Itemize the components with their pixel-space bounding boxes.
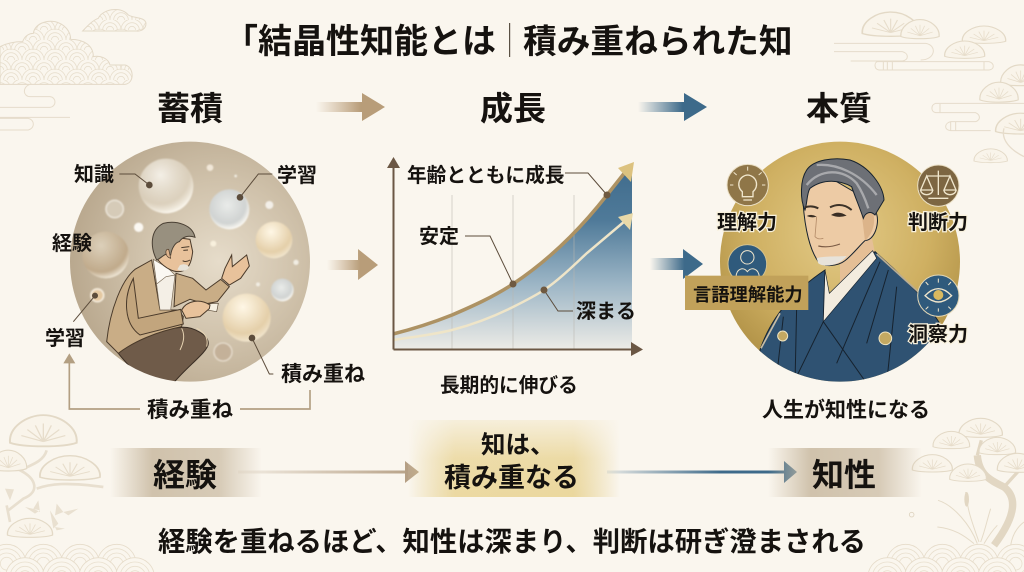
heading: 本質: 本質 [806,90,872,127]
icon: person [728,245,767,283]
band: 知性: 知性 [812,457,876,493]
label: 深まる: 深まる [576,300,636,323]
label: 言語理解能力: 言語理解能力 [693,284,803,305]
panel: 本質 portrait [685,142,960,383]
label: 経験: 経験 [52,232,92,255]
icon: head [801,159,884,266]
data points [604,192,610,198]
label: 判断力: 判断力 [908,211,968,234]
upper curve [393,171,626,334]
decoration: bottom-left pine and waves [0,415,154,572]
band: 知は、積み重なる [408,420,620,497]
icon: seated man [107,222,249,383]
label: 学習 bottom: 学習 [45,327,85,350]
title [224,23,793,61]
band: 経験 [110,448,262,497]
arrow: 知 to 知性 [607,461,797,483]
icon: orbs [82,159,299,361]
decoration: top-right pines [834,12,1024,163]
grid lines [452,195,574,349]
icon: eye [918,275,959,316]
arrow: 経験 to 知 [238,461,419,483]
band: 経験: 経験 [153,457,217,493]
lower curve [393,221,625,340]
arrow: 成長 to 本質 [638,93,707,121]
label: 学習 top: 学習 [277,164,317,187]
callout band [685,276,808,310]
heading: 成長: 成長 [480,90,546,127]
arrow: illustration to chart [327,249,378,280]
leader lines [465,173,607,311]
arrow: chart to portrait [650,249,703,279]
arrow: 蓄積 to 成長 [316,93,385,121]
leader lines [73,174,273,374]
band: 知性 [768,448,922,497]
leader dots [92,182,255,341]
axes [394,165,632,350]
label: 年齢とともに成長: 年齢とともに成長 [407,164,565,187]
panel: 蓄積 illustration [70,142,310,383]
area under curve [393,165,632,349]
decoration: bottom-right pine and waves [868,418,1024,572]
feedback loop arrow [63,353,310,409]
label: 知識: 知識 [74,163,114,186]
label: 積み重ね right: 積み重ね [281,363,365,386]
label: 洞察力: 洞察力 [908,323,968,346]
icon: kimono [760,237,947,383]
chart: growth curve [387,157,643,356]
label: 積み重ね loop: 積み重ね [147,398,234,422]
icon: light bulb [727,164,768,206]
decoration: top-left clouds [0,9,146,130]
caption: 長期的に伸びる: 長期的に伸びる [440,375,578,397]
title: 積み重ねられた知 [523,23,793,61]
closing statement: 経験を重ねるほど、知性は深まり、判断は研ぎ澄まされる [158,526,866,557]
label: 安定: 安定 [419,225,459,248]
band: 知は、積み重なる: 積み重なる [444,463,579,493]
label: 理解力: 理解力 [717,211,777,234]
icon: scales [918,165,959,206]
band: 知は、積み重なる: 知は、 [481,431,554,459]
heading: 蓄積: 蓄積 [157,90,223,127]
title: 「結晶性知能とは [224,23,496,61]
caption: 人生が知性になる: 人生が知性になる [762,398,930,422]
